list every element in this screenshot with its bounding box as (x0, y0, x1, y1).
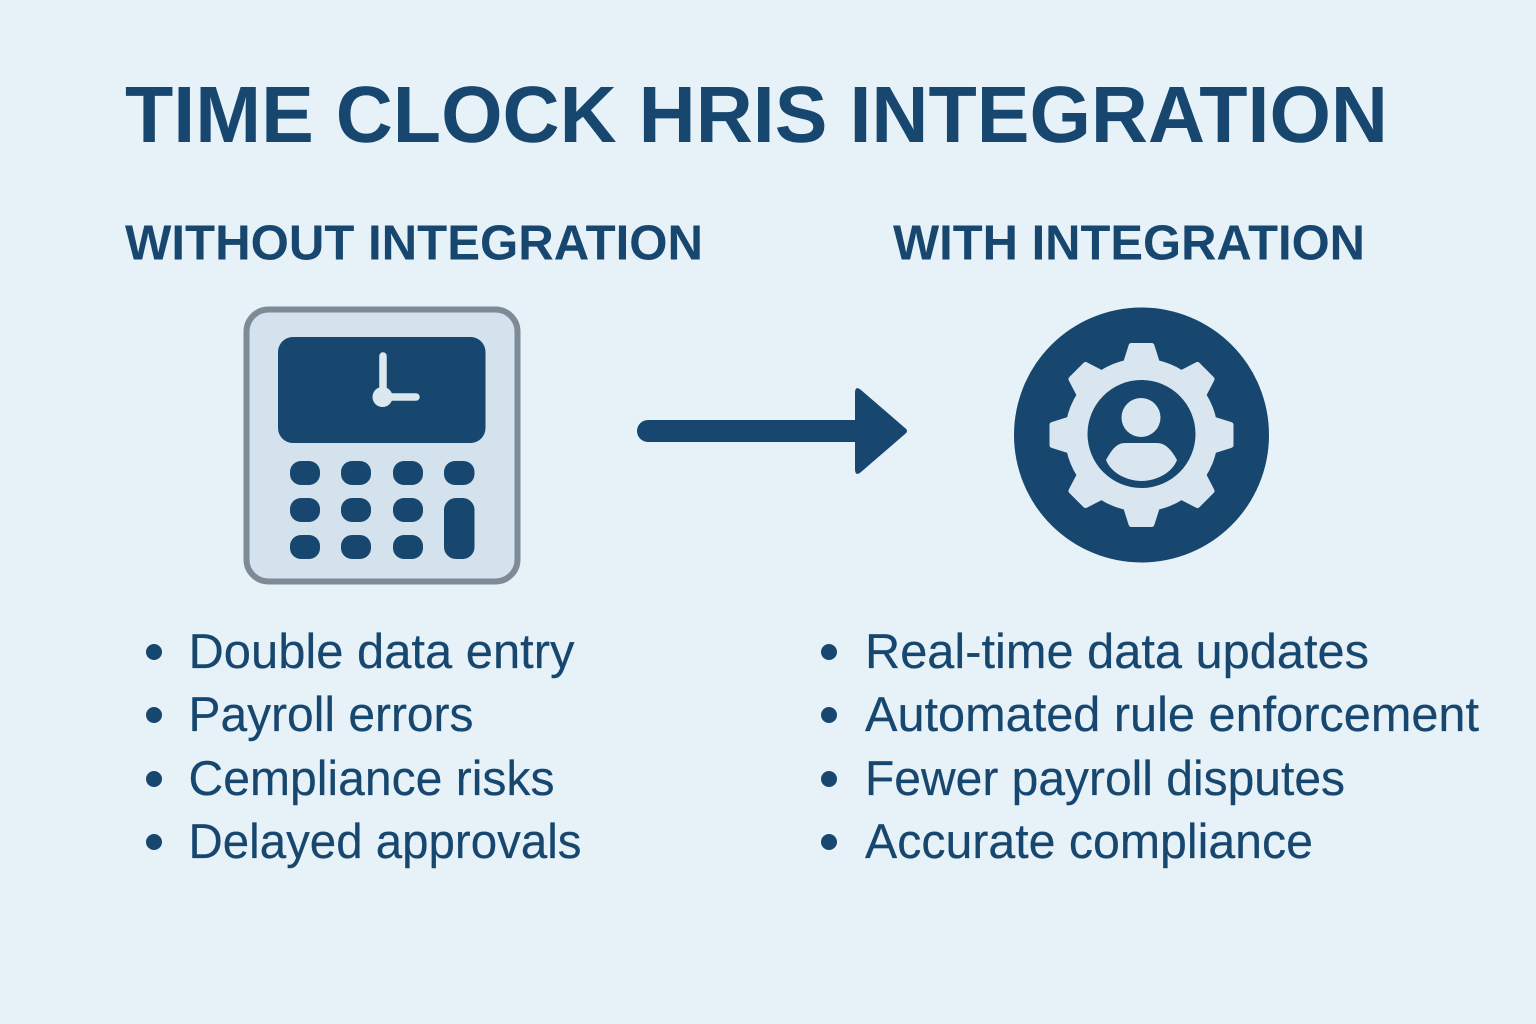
person (1106, 398, 1177, 481)
panel: with integration (821, 216, 1479, 869)
list: benefits with integration: Fewer payroll disputes (865, 752, 1345, 806)
gear (1052, 346, 1230, 524)
list: problems without integration: Payroll errors (188, 688, 474, 742)
heading: without integration: WITHOUT INTEGRATION (125, 216, 703, 270)
icon: gear with person (1014, 308, 1269, 562)
list: benefits with integration (821, 625, 1479, 869)
list: benefits with integration: Real-time data updates (865, 625, 1369, 679)
clock screen (278, 337, 486, 443)
title: TIME CLOCK HRIS INTEGRATION (125, 70, 1388, 159)
list: benefits with integration: Automated rule enforcement (865, 688, 1479, 742)
list: benefits with integration: Accurate compliance (865, 815, 1313, 869)
heading: with integration: WITH INTEGRATION (893, 216, 1365, 270)
list: problems without integration: Double data entry (188, 625, 575, 679)
panel: without integration (125, 216, 703, 869)
icon: time clock terminal (246, 310, 518, 582)
list: problems without integration: Delayed approvals (188, 815, 582, 869)
list: problems without integration (146, 625, 582, 869)
arrow (637, 388, 907, 474)
keypad (290, 461, 474, 559)
list: problems without integration: Cempliance risks (188, 752, 554, 806)
